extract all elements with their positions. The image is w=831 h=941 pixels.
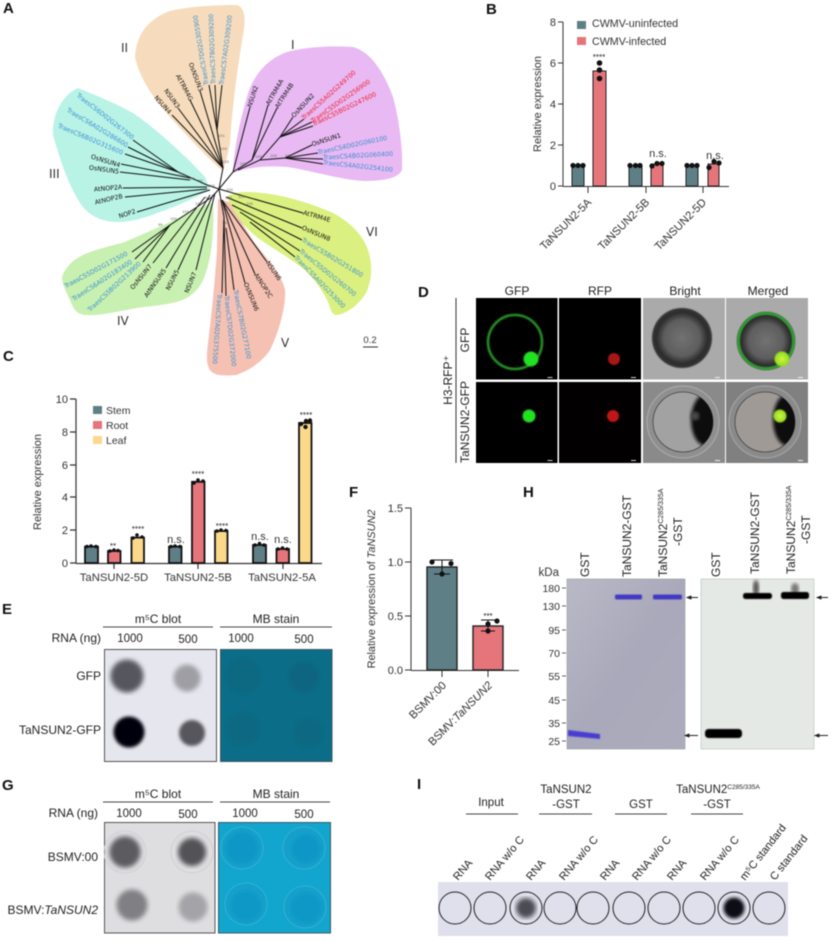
kDa ladder: 70 xyxy=(548,648,560,660)
y tick labels xyxy=(388,503,403,677)
clade III leaf labels: AtNOP2A xyxy=(94,184,123,193)
clade IV leaf labels: NSUN5 xyxy=(165,269,181,292)
lane labels: TaNSUN2-GST xyxy=(748,491,762,574)
Coomassie gel xyxy=(567,579,685,749)
clade labels: IV xyxy=(117,314,130,328)
clade labels: VI xyxy=(366,225,378,239)
clade II blob xyxy=(135,5,245,171)
kDa ladder: 130 xyxy=(542,601,560,613)
heading text: 1000 xyxy=(232,808,258,820)
x labels: BSMV:TaNSUN2 xyxy=(426,679,496,748)
bootstrap values: 100 xyxy=(222,160,230,164)
clade III leaf labels: OsNSUN5 xyxy=(89,165,119,176)
rotated lane labels: RNA xyxy=(451,857,476,883)
x labels: TaNSUN2-5B xyxy=(164,572,232,584)
bootstrap values: 100 xyxy=(238,195,246,199)
bootstrap values: 94 xyxy=(205,196,210,200)
m5C blot membrane xyxy=(104,650,216,762)
x labels: BSMV:00 xyxy=(407,680,449,722)
panel I: in vitro dot blot xyxy=(417,776,810,936)
group headings: GST xyxy=(629,799,653,811)
clade V leaf labels: TraesCS7B02G277100 xyxy=(231,288,252,360)
lane labels: -GST xyxy=(799,515,813,544)
significance labels xyxy=(110,411,312,551)
panel D: confocal microscopy xyxy=(418,284,808,463)
kDa ladder: kDa xyxy=(539,567,560,579)
clade I leaf labels: TraesCS4B02G060400 xyxy=(322,151,393,162)
significance labels: n.s. xyxy=(251,531,269,543)
lane labels: GST xyxy=(709,552,723,577)
x labels: TaNSUN2-5A xyxy=(538,196,594,253)
group headings: Input xyxy=(478,797,505,809)
heading text: m⁵C blot xyxy=(135,612,182,626)
x labels: TaNSUN2-5A xyxy=(248,572,316,584)
significance labels xyxy=(593,53,724,162)
group headings: TaNSUN2 xyxy=(676,784,727,796)
clade I leaf labels: AtTRM4B xyxy=(274,82,296,110)
legend xyxy=(577,18,678,48)
clade II leaf labels: AtTRM4G xyxy=(174,73,194,103)
clade V blob xyxy=(207,199,285,375)
panel letter H: H xyxy=(523,484,534,501)
y tick labels: 4 xyxy=(62,492,68,504)
bootstrap values: 99 xyxy=(198,179,203,183)
m5C blot membrane xyxy=(104,822,215,933)
legend: Leaf xyxy=(106,435,127,447)
clade labels: III xyxy=(49,167,60,181)
data points xyxy=(85,418,312,553)
heading text: 1000 xyxy=(228,633,254,645)
heading text: 500 xyxy=(178,634,198,646)
significance labels: **** xyxy=(192,470,204,479)
lane labels: TaNSUN2-GST xyxy=(620,494,634,577)
clade IV leaf labels: TraesCS6A02G183400 xyxy=(70,259,134,303)
y axis label: Relative expression xyxy=(532,56,544,152)
tree branches xyxy=(120,85,323,296)
group headings: C285/335A xyxy=(727,784,760,791)
y tick labels: 4 xyxy=(550,99,556,111)
significance labels: n.s. xyxy=(274,534,292,546)
significance labels: **** xyxy=(216,522,228,531)
rotated lane labels: RNA w/o C xyxy=(698,834,742,883)
panel B: bar chart CWMV xyxy=(486,1,729,253)
group headings: -GST xyxy=(552,799,580,811)
y tick labels: 0 xyxy=(550,181,556,193)
heading text: MB stain xyxy=(253,787,299,801)
bars xyxy=(427,567,503,670)
legend: Root xyxy=(106,420,128,432)
bootstrap values: 100 xyxy=(270,154,278,158)
heading text: TaNSUN2-GFP xyxy=(19,723,101,737)
heading text xyxy=(19,612,314,737)
bootstrap values: 97 xyxy=(285,154,290,158)
bootstrap values: 100 xyxy=(225,196,233,200)
MB stain membrane xyxy=(220,650,332,762)
heading text: 1000 xyxy=(117,633,143,645)
clade III leaf labels: TraesCS6B02G315600 xyxy=(56,122,124,157)
heading text: 1000 xyxy=(116,808,142,820)
clade labels xyxy=(49,38,378,350)
rotated lane labels: RNA xyxy=(598,857,623,883)
column headings xyxy=(505,284,788,298)
clade II leaf labels xyxy=(152,14,234,116)
rotated lane labels: RNA w/o C xyxy=(630,834,674,883)
group headings: TaNSUN2 xyxy=(540,784,592,796)
clade I leaf labels xyxy=(247,69,393,174)
y tick labels: 8 xyxy=(550,17,556,29)
y tick labels: 10 xyxy=(56,394,68,406)
clade V leaf labels xyxy=(211,260,282,367)
axes xyxy=(558,22,729,193)
y tick labels: 6 xyxy=(550,58,556,70)
lane labels: TaNSUN2 xyxy=(784,521,798,574)
clade V leaf labels: NSUN6 xyxy=(264,260,282,282)
rotated lane labels: RNA w/o C xyxy=(557,834,601,883)
micrograph row 1 GFP xyxy=(476,298,558,380)
axes xyxy=(70,399,322,569)
clade VI leaf labels: TraesCS5A02G253000 xyxy=(292,254,346,310)
lane labels: C285/335A xyxy=(658,488,665,524)
clade I leaf labels: TraesCS4A02G254100 xyxy=(322,159,393,174)
axes xyxy=(405,508,519,677)
clade II leaf labels: NSUN3 xyxy=(162,88,181,110)
clade V leaf labels: OsNSUN6 xyxy=(242,282,260,312)
bootstrap values: 100 xyxy=(240,162,248,166)
kDa ladder: 180 xyxy=(542,583,560,595)
row labels: GFP xyxy=(458,328,472,352)
y tick labels: 0 xyxy=(62,558,68,570)
clade IV leaf labels xyxy=(62,251,199,314)
clade III leaf labels: AtNOP2B xyxy=(94,193,124,206)
heading text xyxy=(8,787,314,917)
bootstrap values: 100 xyxy=(222,221,230,225)
clade I leaf labels: OsNSUN1 xyxy=(311,132,342,148)
clade III leaf labels: TraesCS6D02G267300 xyxy=(74,92,135,141)
panel H: gels xyxy=(523,484,828,749)
bootstrap values: 100 xyxy=(226,188,234,192)
heading text: MB stain xyxy=(253,612,299,626)
column headings: GFP xyxy=(505,284,529,298)
x labels xyxy=(80,572,316,584)
x labels: TaNSUN2-5B xyxy=(596,197,652,253)
legend: CWMV-infected xyxy=(592,36,666,48)
bootstrap values: 101 xyxy=(218,134,225,138)
heading text: 500 xyxy=(178,809,198,821)
significance labels: n.s. xyxy=(649,148,667,160)
heading rules xyxy=(466,813,743,815)
clade IV leaf labels: NSUN7 xyxy=(184,271,199,294)
clade I leaf labels: TraesCS5D02G256900 xyxy=(309,79,372,125)
bootstrap values: 100 xyxy=(246,202,254,206)
y axis label: Relative expression of TaNSUN2 xyxy=(366,510,378,668)
kDa ladder: 55 xyxy=(548,671,560,683)
bootstrap values: 100 xyxy=(188,177,196,181)
clade IV leaf labels: AtNNSUN5 xyxy=(143,268,168,299)
panel letter I: I xyxy=(417,776,421,793)
panel A: phylogenetic tree xyxy=(3,0,402,375)
heading text: RNA (ng) xyxy=(49,806,98,820)
heading text: m⁵C blot xyxy=(135,787,182,801)
clade II leaf labels: NSUN4 xyxy=(152,95,172,116)
significance labels: **** xyxy=(132,525,144,534)
clade V leaf labels: AtNOP2C xyxy=(252,272,274,300)
kDa ladder: 25 xyxy=(548,736,560,748)
panel G: dot blot xyxy=(2,777,330,933)
kDa ladder: 35 xyxy=(548,718,560,730)
y tick labels: 0.0 xyxy=(388,665,403,677)
clade I leaf labels: OsNSUN2 xyxy=(290,92,316,119)
clade I leaf labels: TraesCS5A02G249700 xyxy=(300,69,357,122)
clade III leaf labels: NOP2 xyxy=(118,208,137,220)
heading text: RNA (ng) xyxy=(52,631,101,645)
y tick labels xyxy=(56,394,68,570)
kDa ladder: 95 xyxy=(548,625,560,637)
clade VI blob xyxy=(227,192,371,315)
rotated lane labels xyxy=(451,822,810,883)
heading rules xyxy=(103,801,330,803)
micrograph row 1 Merged xyxy=(726,298,808,380)
column headings: Merged xyxy=(748,284,788,298)
micrograph row 2 Merged xyxy=(726,382,808,463)
significance label: *** xyxy=(483,612,493,621)
panel letter C: C xyxy=(3,348,14,365)
legend: Stem xyxy=(106,405,131,417)
clade IV leaf labels: TraesCS5B02G213900 xyxy=(86,261,143,314)
clade II leaf labels: OsNSUN3 xyxy=(187,62,204,93)
clade I blob xyxy=(233,47,402,181)
row labels: H3-RFP⁺ xyxy=(441,355,455,405)
bootstrap values: 100 xyxy=(170,217,178,221)
significance labels: **** xyxy=(300,411,312,420)
data points xyxy=(570,60,722,170)
y tick labels: 8 xyxy=(62,427,68,439)
column headings: Bright xyxy=(669,284,701,298)
clade III blob xyxy=(53,88,210,222)
significance labels: ** xyxy=(110,542,116,551)
western blot gel xyxy=(701,579,814,749)
bootstrap values: 100 xyxy=(255,155,263,159)
lane labels: -GST xyxy=(671,517,685,546)
significance labels: n.s. xyxy=(706,150,724,162)
clade V leaf labels: TraesCS7D02G372000 xyxy=(222,295,237,367)
micrograph row 2 Bright xyxy=(643,382,725,463)
rotated lane labels: C standard xyxy=(768,833,810,883)
bootstrap values: 100 xyxy=(208,184,216,188)
membrane xyxy=(438,882,788,936)
lane labels: TaNSUN2 xyxy=(656,524,670,577)
kDa ladder xyxy=(539,567,566,748)
y tick labels: 2 xyxy=(62,525,68,537)
micrograph row 2 GFP xyxy=(476,382,558,463)
kDa ladder: 45 xyxy=(548,695,560,707)
clade VI leaf labels: TraesCS5B02G251800 xyxy=(299,236,364,279)
rotated lane labels: RNA w/o C xyxy=(483,834,527,883)
bootstrap values: 100 xyxy=(195,202,203,206)
clade I leaf labels: AtTRM4A xyxy=(265,78,286,107)
y tick labels: 0.5 xyxy=(388,611,403,623)
y tick labels: 6 xyxy=(62,460,68,472)
lane labels xyxy=(578,485,813,577)
clade I leaf labels: NSUN2 xyxy=(247,85,260,108)
x labels: TaNSUN2-5D xyxy=(80,572,148,584)
rotated lane labels: m⁵C standard xyxy=(738,822,789,883)
micrograph row 2 RFP xyxy=(559,382,641,463)
panel F: knockdown bar chart xyxy=(349,484,519,748)
rotated lane labels: RNA xyxy=(665,857,690,883)
heading text: BSMV:00 xyxy=(48,850,98,864)
heading text: BSMV:TaNSUN2 xyxy=(8,903,98,917)
panel letter A: A xyxy=(3,0,14,17)
panel C: tissue expression bar chart xyxy=(3,348,322,584)
panel letter G: G xyxy=(2,777,14,794)
clade III leaf labels xyxy=(56,92,137,220)
bootstrap values xyxy=(158,134,290,227)
clade III leaf labels: OsNSUN4 xyxy=(90,154,121,169)
heading text: 500 xyxy=(294,809,314,821)
bootstrap values: 100 xyxy=(182,210,190,214)
clade V leaf labels: TraesCS7A02G375500 xyxy=(211,293,223,364)
lane labels: GST xyxy=(578,552,592,577)
heading rules xyxy=(103,626,332,628)
clade I leaf labels: TraesCS5B02G247600 xyxy=(311,91,378,129)
clade II leaf labels: TraesCS7B02G309200 xyxy=(208,14,218,85)
clade labels: II xyxy=(121,41,128,55)
row labels: TaNSUN2-GFP xyxy=(458,381,472,463)
significance labels: **** xyxy=(593,53,605,62)
MB stain membrane xyxy=(218,822,330,933)
heading text: GFP xyxy=(76,669,101,683)
clade VI leaf labels: AtTRM4E xyxy=(302,210,331,224)
legend: CWMV-uninfected xyxy=(592,18,678,30)
clade IV blob xyxy=(62,203,213,315)
band arrows xyxy=(685,596,828,737)
heading text: 500 xyxy=(294,634,314,646)
clade II leaf labels: TraesCS7A02G309200 xyxy=(218,15,234,86)
panel letter B: B xyxy=(486,1,497,18)
bootstrap values: 100 xyxy=(220,147,228,151)
group headings xyxy=(478,784,760,811)
y tick labels: 1.5 xyxy=(388,503,403,515)
row labels xyxy=(441,298,472,463)
group headings: -GST xyxy=(703,799,731,811)
panel letter F: F xyxy=(349,484,358,501)
clade VI leaf labels: TraesCS5D02G260700 xyxy=(297,248,357,298)
clade IV leaf labels: OsNSUN7 xyxy=(129,263,154,291)
micrograph row 1 Bright xyxy=(643,298,725,380)
y tick labels: 1.0 xyxy=(388,557,403,569)
clade VI leaf labels: OsNSUN8 xyxy=(301,225,331,243)
y tick labels: 2 xyxy=(550,140,556,152)
micrograph row 1 RFP xyxy=(559,298,641,380)
panel E: dot blot xyxy=(2,601,332,762)
clade IV leaf labels: TraesCS5D02G171500 xyxy=(62,251,129,291)
clade II leaf labels: TraesCS7D02G305900 xyxy=(192,15,211,87)
clade I leaf labels: TraesCS4D02G060100 xyxy=(316,135,388,157)
x labels: TaNSUN2-5D xyxy=(653,197,709,253)
y tick labels xyxy=(550,17,556,193)
legend xyxy=(93,405,131,447)
lane labels: C285/335A xyxy=(786,485,793,521)
bars xyxy=(85,423,312,563)
clade VI leaf labels xyxy=(292,210,364,310)
bootstrap values: 77 xyxy=(222,209,227,213)
bootstrap values: 99 xyxy=(158,223,163,227)
scale bar: 0.2 xyxy=(363,335,377,346)
data points xyxy=(429,559,500,634)
column headings: RFP xyxy=(588,284,612,298)
x labels xyxy=(538,196,709,253)
bootstrap values: 100 xyxy=(178,173,186,177)
y axis label: Relative expression xyxy=(32,434,44,530)
panel letter E: E xyxy=(2,601,12,618)
clade III leaf labels: TraesCS6A02G286600 xyxy=(64,106,129,149)
clade labels: V xyxy=(281,336,290,350)
error bars xyxy=(431,560,495,631)
panel letter D: D xyxy=(418,284,429,301)
bars xyxy=(572,71,719,186)
rotated lane labels: RNA xyxy=(524,857,549,883)
significance labels: n.s. xyxy=(167,534,185,546)
clade labels: I xyxy=(291,38,295,52)
